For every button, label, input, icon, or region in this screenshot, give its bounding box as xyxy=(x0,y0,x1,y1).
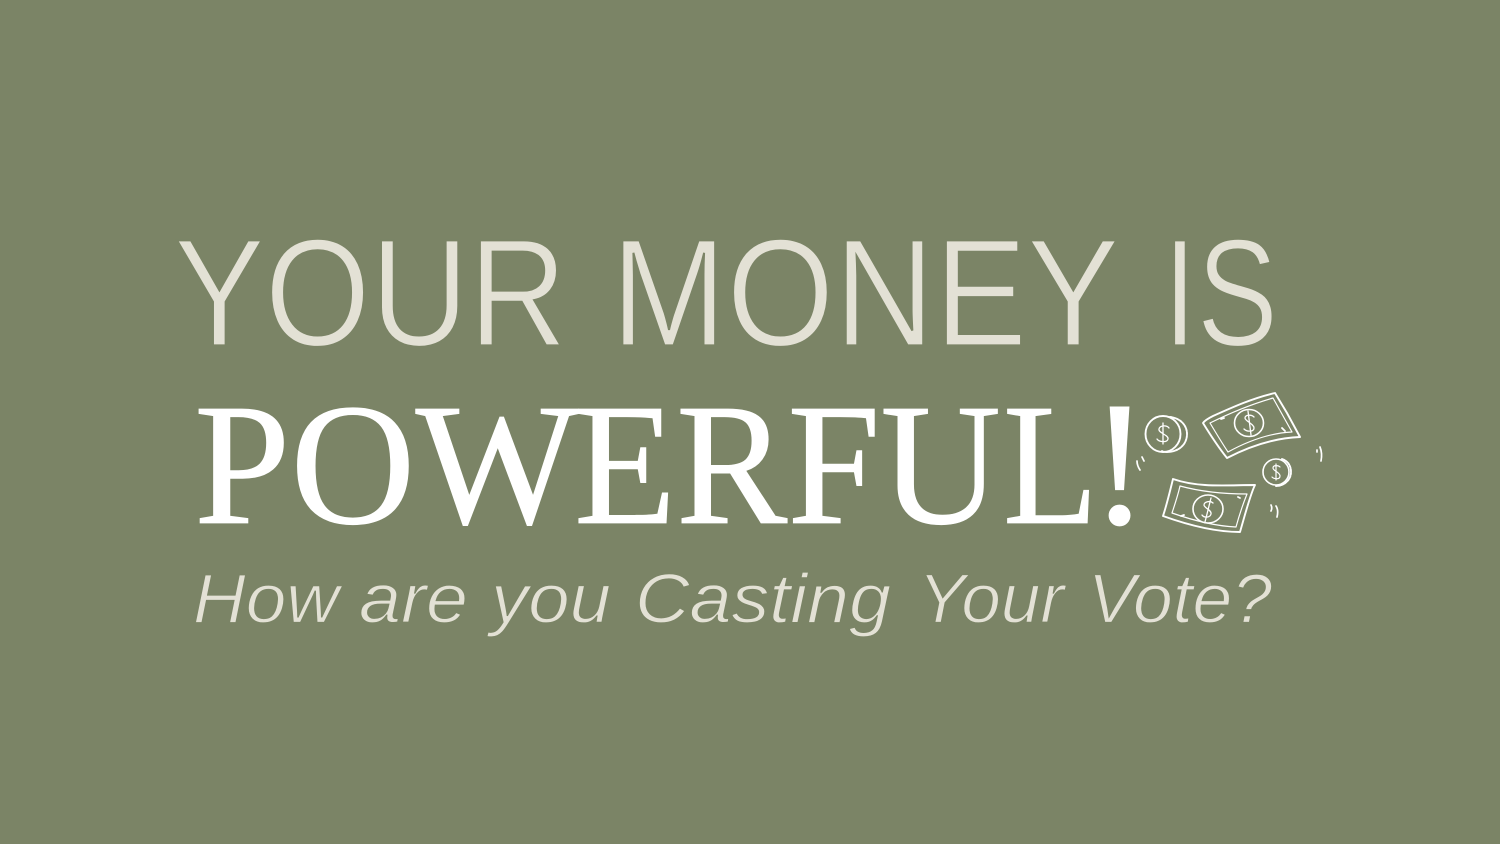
heading: powerful: ! xyxy=(1090,364,1149,562)
subtitle question: you xyxy=(487,560,611,638)
title line: your money is: MONEY xyxy=(611,208,1117,378)
subtitle question: How xyxy=(193,560,344,638)
icon: motion marks xyxy=(1137,447,1322,517)
icon: lower banknote xyxy=(1163,479,1255,532)
title line: your money is: IS xyxy=(1163,208,1278,378)
subtitle question: are xyxy=(359,560,468,638)
icon: flying money xyxy=(1137,393,1322,532)
title line: your money is: YOUR xyxy=(174,208,567,378)
subtitle question: Casting xyxy=(635,560,891,638)
icon: upper banknote xyxy=(1203,393,1300,458)
heading: powerful: ERFU xyxy=(574,368,1001,561)
heading: powerful xyxy=(194,364,1149,562)
icon: small coin xyxy=(1263,459,1291,486)
subtitle question: Vote? xyxy=(1088,560,1272,638)
icon: large coin xyxy=(1146,416,1187,452)
heading: powerful: L xyxy=(1003,368,1098,561)
subtitle question: Your xyxy=(918,560,1067,638)
heading: powerful: POW xyxy=(194,368,579,561)
